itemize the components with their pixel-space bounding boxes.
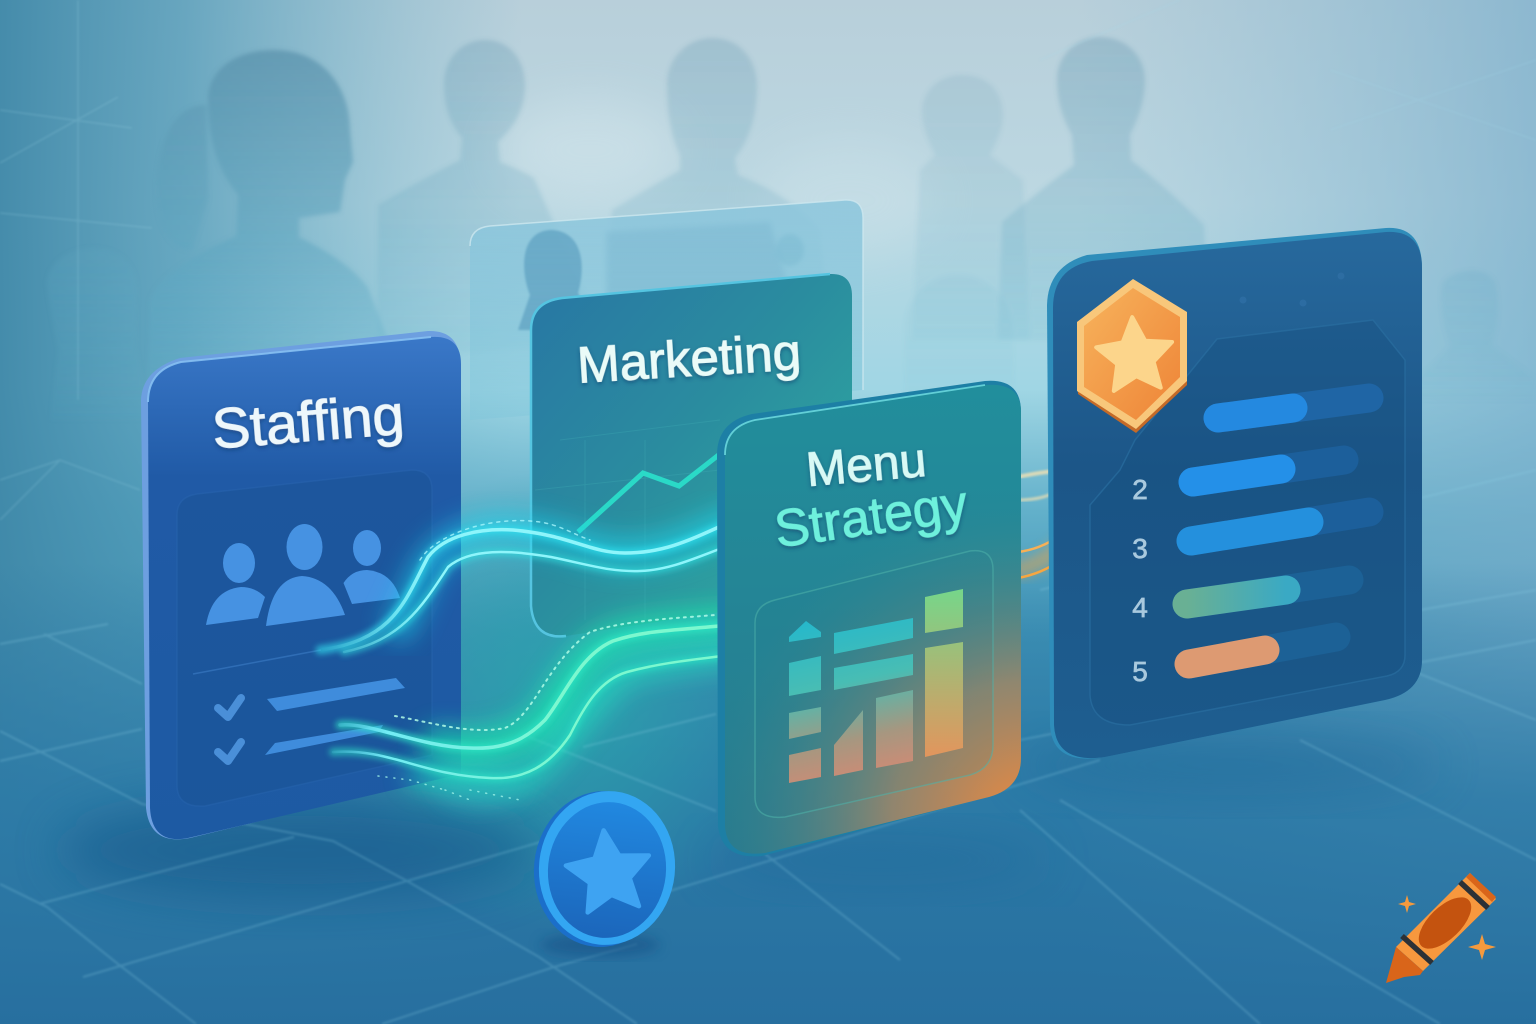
panel: Staffing	[141, 331, 461, 839]
rank fills	[1187, 408, 1309, 664]
rank tracks	[1187, 398, 1369, 664]
flowing orange light stream	[1018, 470, 1092, 578]
bar chart	[789, 589, 963, 783]
panel: ranking board	[1047, 228, 1422, 759]
soft glow blending card edge into streams	[434, 752, 526, 808]
background crowd silhouettes	[47, 37, 1536, 430]
rank numbers: 2	[1132, 474, 1148, 505]
flowing green light stream	[333, 615, 730, 800]
icon: team of three people	[206, 524, 400, 626]
panel: Menu Strategy	[717, 381, 1021, 856]
card dots	[1240, 272, 1344, 306]
icon: hexagon star badge	[1077, 279, 1187, 433]
icon: orange crayon logo	[1386, 873, 1496, 983]
panel: Marketing	[531, 274, 852, 636]
back glass panel	[470, 200, 863, 420]
heading: Staffing: Staffing	[210, 383, 406, 461]
ranking inner panel	[1090, 320, 1405, 725]
icon: checklist	[218, 678, 405, 761]
icon: blue star coin	[526, 784, 683, 957]
marketing trend line	[578, 450, 725, 532]
heading: Marketing: Marketing	[576, 323, 803, 394]
staffing inner panel	[177, 470, 432, 806]
upper background lines	[0, 0, 1536, 520]
floor grid lines	[0, 470, 1536, 1024]
rank numbers	[1132, 474, 1148, 687]
heading: Strategy: Strategy	[771, 475, 971, 559]
flowing cyan light stream	[320, 521, 730, 652]
menu inner chart panel	[755, 551, 993, 817]
heading: Menu: Menu	[804, 434, 928, 497]
rank numbers: 5	[1132, 656, 1148, 687]
rank numbers: 3	[1132, 533, 1148, 564]
rank numbers: 4	[1132, 592, 1148, 623]
